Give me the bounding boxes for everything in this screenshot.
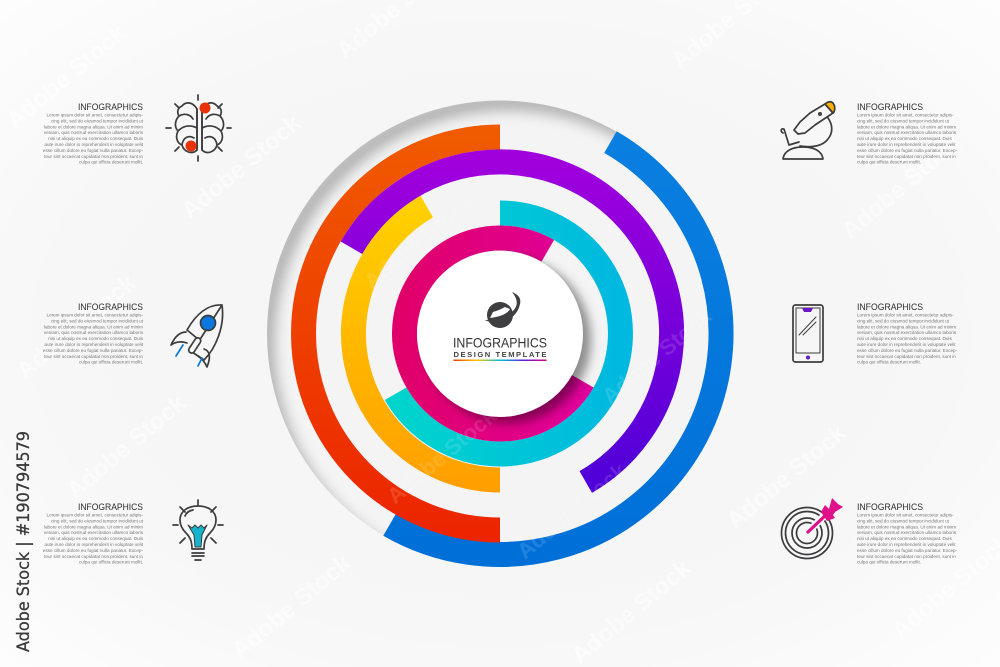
- watermark: Adobe Stock: [12, 269, 142, 385]
- body text: teur sint occaecat cupidatat non proident, sunt in: [44, 554, 143, 559]
- panel: circular diagram: [304, 137, 721, 555]
- body text: nisi ut aliquip ex ea commodo consequat. Duis: [48, 336, 144, 341]
- ring: cyan: [396, 213, 620, 454]
- body text: labore et dolore magna aliqua. Ut enim ad minim: [857, 124, 956, 129]
- logo icon: [484, 292, 520, 328]
- body text: cing elit, sed do eiusmod tempor incididunt ut: [51, 118, 144, 123]
- body text: esse cillum dolore eu fugiat nulla pariatur. Excep-: [857, 348, 958, 353]
- body text: cing elit, sed do eiusmod tempor incididunt ut: [51, 518, 144, 523]
- icon: light bulb: [173, 500, 223, 560]
- body text: Lorem ipsum dolor sit amet, consectetur adipis-: [46, 112, 143, 118]
- body text: labore et dolore magna aliqua. Ut enim ad minim: [857, 524, 956, 529]
- body text: culpa qui officia deserunt mollit.: [857, 560, 921, 565]
- heading: INFOGRAPHICS: [78, 301, 143, 312]
- body text: veniam, quis nostrud exercitation ullamco laboris: [44, 330, 144, 335]
- body text: culpa qui officia deserunt mollit.: [79, 560, 143, 565]
- ring: blue: [390, 142, 721, 555]
- central circle shadow: [425, 257, 591, 423]
- body text: aute irure dolor in reprehenderit in voluptate velit: [857, 342, 956, 347]
- block: bottom right: [857, 501, 958, 565]
- watermark: Adobe Stock: [837, 129, 967, 245]
- icon: brain: [166, 95, 231, 161]
- body text: Lorem ipsum dolor sit amet, consectetur adipis-: [46, 512, 143, 518]
- watermark over rings: Adobe Stock: [512, 458, 632, 564]
- body text: teur sint occaecat cupidatat non proident, sunt in: [857, 354, 956, 359]
- body text: Lorem ipsum dolor sit amet, consectetur adipis-: [857, 112, 954, 118]
- body text: teur sint occaecat cupidatat non proident, sunt in: [857, 554, 956, 559]
- ring: magenta: [404, 238, 583, 429]
- block: middle right: [857, 301, 958, 365]
- icon: target: [782, 498, 843, 558]
- ring: yellow: [353, 207, 500, 480]
- watermark: Adobe Stock: [2, 19, 132, 135]
- block: top right: [857, 101, 958, 165]
- center title: INFOGRAPHICS: [453, 334, 547, 350]
- body text: veniam, quis nostrud exercitation ullamco laboris: [44, 130, 144, 135]
- body text: veniam, quis nostrud exercitation ullamco laboris: [44, 530, 144, 535]
- watermark: Adobe Stock: [177, 109, 307, 225]
- block: top left: [43, 101, 144, 165]
- body text: veniam, quis nostrud exercitation ullamco laboris: [857, 330, 957, 335]
- body text: cing elit, sed do eiusmod tempor incididunt ut: [857, 318, 950, 323]
- center subtitle: DESIGN TEMPLATE: [454, 350, 546, 359]
- watermark over rings: Adobe Stock: [359, 188, 479, 294]
- ring: red orange: [304, 137, 500, 530]
- recessed background disc: [267, 100, 616, 535]
- heading: INFOGRAPHICS: [78, 101, 143, 112]
- block: bottom left: [43, 501, 144, 565]
- body text: Lorem ipsum dolor sit amet, consectetur adipis-: [857, 312, 954, 318]
- watermark: Adobe Stock: [722, 419, 852, 535]
- body text: aute irure dolor in reprehenderit in voluptate velit: [44, 342, 144, 347]
- side credit: Adobe Stock | #190794579: [14, 431, 34, 652]
- body text: esse cillum dolore eu fugiat nulla pariatur. Excep-: [857, 548, 958, 553]
- watermark over rings: [359, 188, 717, 564]
- body text: cing elit, sed do eiusmod tempor incididunt ut: [857, 118, 950, 123]
- body text: esse cillum dolore eu fugiat nulla pariatur. Excep-: [43, 548, 143, 553]
- body text: nisi ut aliquip ex ea commodo consequat. Duis: [857, 336, 952, 341]
- body text: aute irure dolor in reprehenderit in voluptate velit: [44, 142, 144, 147]
- body text: teur sint occaecat cupidatat non proident, sunt in: [857, 154, 956, 159]
- watermark over rings: Adobe Stock: [597, 303, 717, 409]
- watermark over rings: Adobe Stock: [382, 403, 502, 509]
- body text: Lorem ipsum dolor sit amet, consectetur adipis-: [857, 512, 954, 518]
- body text: veniam, quis nostrud exercitation ullamco laboris: [857, 130, 957, 135]
- icon: rocket: [171, 305, 223, 367]
- heading: INFOGRAPHICS: [78, 501, 143, 512]
- body text: aute irure dolor in reprehenderit in voluptate velit: [857, 542, 956, 547]
- body text: culpa qui officia deserunt mollit.: [857, 360, 921, 365]
- heading: INFOGRAPHICS: [857, 301, 923, 312]
- body text: aute irure dolor in reprehenderit in voluptate velit: [44, 542, 144, 547]
- body text: nisi ut aliquip ex ea commodo consequat. Duis: [857, 136, 952, 141]
- body text: teur sint occaecat cupidatat non proident, sunt in: [44, 354, 143, 359]
- body text: cing elit, sed do eiusmod tempor incididunt ut: [51, 318, 144, 323]
- body text: esse cillum dolore eu fugiat nulla pariatur. Excep-: [43, 148, 143, 153]
- body text: labore et dolore magna aliqua. Ut enim ad minim: [44, 124, 143, 129]
- body text: nisi ut aliquip ex ea commodo consequat. Duis: [48, 536, 144, 541]
- body text: Lorem ipsum dolor sit amet, consectetur adipis-: [46, 312, 143, 318]
- body text: nisi ut aliquip ex ea commodo consequat. Duis: [857, 536, 952, 541]
- block: middle left: [43, 301, 144, 365]
- icon: microscope: [781, 102, 835, 159]
- central white circle: [417, 251, 583, 417]
- heading: INFOGRAPHICS: [857, 101, 923, 112]
- body text: culpa qui officia deserunt mollit.: [79, 160, 143, 165]
- body text: teur sint occaecat cupidatat non proident, sunt in: [44, 154, 143, 159]
- body text: cing elit, sed do eiusmod tempor incididunt ut: [857, 518, 950, 523]
- ring: purple: [352, 162, 672, 482]
- body text: veniam, quis nostrud exercitation ullamco laboris: [857, 530, 957, 535]
- watermark: Adobe Stock: [227, 549, 357, 665]
- body text: labore et dolore magna aliqua. Ut enim ad minim: [44, 524, 143, 529]
- body text: aute irure dolor in reprehenderit in voluptate velit: [857, 142, 956, 147]
- watermark: Adobe Stock: [567, 554, 697, 667]
- body text: esse cillum dolore eu fugiat nulla pariatur. Excep-: [857, 148, 958, 153]
- body text: culpa qui officia deserunt mollit.: [857, 160, 921, 165]
- body text: culpa qui officia deserunt mollit.: [79, 360, 143, 365]
- icon: smartphone: [793, 305, 823, 362]
- body text: labore et dolore magna aliqua. Ut enim ad minim: [857, 324, 956, 329]
- body text: nisi ut aliquip ex ea commodo consequat. Duis: [48, 136, 144, 141]
- heading: INFOGRAPHICS: [857, 501, 923, 512]
- body text: labore et dolore magna aliqua. Ut enim ad minim: [44, 324, 143, 329]
- body text: esse cillum dolore eu fugiat nulla pariatur. Excep-: [43, 348, 143, 353]
- rainbow rule: [454, 360, 546, 361]
- watermark: Adobe Stock: [62, 389, 192, 505]
